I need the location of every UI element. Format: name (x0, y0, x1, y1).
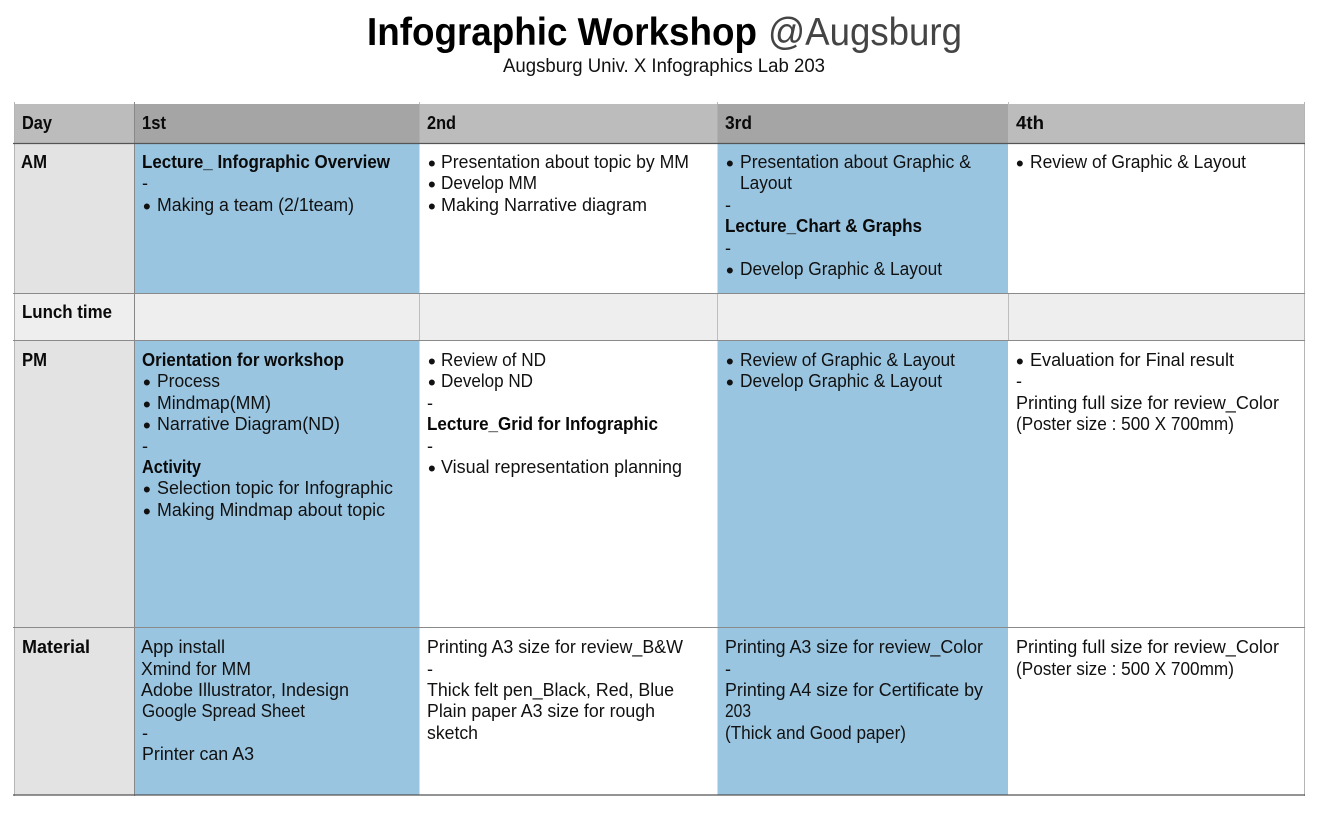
header: 1st (134, 104, 420, 144)
row: Lunch time: Lunch time (22, 302, 112, 322)
PM day 4: • (1016, 349, 1024, 374)
AM day 3: - (725, 195, 731, 215)
Material day 2 (427, 637, 683, 743)
AM day 2: Presentation about topic by MM (441, 152, 689, 172)
PM day 1: • (143, 499, 151, 524)
PM day 3: • (726, 370, 734, 395)
AM day 1: Making a team (2/1team) (157, 195, 354, 215)
PM day 2: • (428, 456, 436, 481)
PM day 1: Making Mindmap about topic (157, 500, 385, 520)
Material day 3: Printing A4 size for Certificate by (725, 680, 983, 700)
AM day 3 (718, 144, 1008, 293)
Material day 4 (1016, 637, 1279, 679)
row: PM (14, 340, 1279, 627)
Material day 4: (Poster size : 500 X 700mm) (1016, 659, 1234, 679)
AM day 3: Layout (740, 173, 792, 193)
Material day 2: - (427, 659, 433, 679)
PM day 1: Mindmap(MM) (157, 393, 271, 413)
Material day 1: Xmind for MM (141, 659, 251, 679)
PM day 2: Lecture_Grid for Infographic (427, 414, 658, 434)
Material day 3: 203 (725, 701, 751, 721)
AM day 3: Develop Graphic & Layout (740, 259, 942, 279)
row label: PM: PM (22, 350, 47, 370)
AM day 2: • (428, 194, 436, 219)
AM day 1: - (142, 173, 148, 193)
PM day 2: • (428, 349, 436, 374)
PM day 2: Visual representation planning (441, 457, 682, 477)
Material day 3: Printing A3 size for review_Color (725, 637, 983, 658)
row: AM (14, 144, 1246, 293)
main title: Infographic Workshop (367, 11, 757, 54)
PM day 1: Orientation for workshop (142, 350, 344, 370)
PM day 1: • (143, 392, 151, 417)
AM day 2: • (428, 172, 436, 197)
AM day 4: Review of Graphic & Layout (1030, 152, 1246, 172)
header: 3rd: 3rd (725, 113, 752, 133)
header: 4th (1008, 104, 1304, 144)
AM day 2: • (428, 151, 436, 176)
row: Lunch time (14, 293, 1304, 340)
PM day 2: Review of ND (441, 350, 546, 370)
AM day 3: • (726, 258, 734, 283)
subtitle: Augsburg Univ. X Infographics Lab 203 (503, 56, 825, 77)
Material day 1: - (142, 723, 148, 743)
PM day 1: Process (157, 371, 220, 391)
PM day 1: Selection topic for Infographic (157, 478, 393, 498)
PM day 4: (Poster size : 500 X 700mm) (1016, 414, 1234, 434)
AM day 1: • (143, 194, 151, 219)
PM day 1: • (143, 413, 151, 438)
AM day 1 (134, 144, 420, 293)
Material day 2: sketch (427, 723, 478, 743)
header: 4th: 4th (1016, 113, 1044, 133)
PM day 4: Evaluation for Final result (1030, 350, 1234, 370)
main title (367, 11, 962, 54)
Material day 3: - (725, 659, 731, 679)
PM day 2: • (428, 370, 436, 395)
Material day 3 (718, 627, 1008, 795)
Material day 2: Plain paper A3 size for rough (427, 701, 655, 721)
row label: Material: Material (22, 637, 90, 657)
PM day 2: Develop ND (441, 371, 533, 391)
PM day 1: • (143, 477, 151, 502)
header row (14, 104, 1304, 144)
PM day 2: - (427, 393, 433, 413)
AM day 1: Lecture_ Infographic Overview (142, 152, 391, 172)
main title: @Augsburg (768, 11, 962, 54)
PM day 4: - (1016, 371, 1022, 391)
Material day 1: App install (141, 637, 225, 657)
AM day 3: Lecture_Chart & Graphs (725, 216, 922, 236)
PM day 1: Narrative Diagram(ND) (157, 414, 340, 434)
header: 2nd: 2nd (427, 113, 456, 133)
header: 1st: 1st (142, 113, 166, 133)
Material day 1: Adobe Illustrator, Indesign (141, 680, 349, 700)
header: Day: Day (22, 113, 52, 133)
row label: Material (14, 627, 134, 795)
row label: AM (14, 144, 134, 293)
PM day 3 (718, 340, 1008, 627)
AM day 4: • (1016, 151, 1024, 176)
AM day 3: • (726, 151, 734, 176)
Material day 1: Printer can A3 (142, 744, 254, 764)
header: Day (14, 104, 134, 144)
PM day 4 (1016, 349, 1279, 434)
AM day 2 (428, 151, 689, 219)
Material day 1: Google Spread Sheet (142, 701, 305, 721)
Material day 4: Printing full size for review_Color (1016, 637, 1279, 658)
PM day 1: • (143, 370, 151, 395)
Material day 2: Printing A3 size for review_B&W (427, 637, 683, 658)
row label: PM (14, 340, 134, 627)
title block (367, 11, 962, 77)
Material day 1 (134, 627, 420, 795)
row: Material (14, 627, 1279, 795)
header: 3rd (718, 104, 1008, 144)
PM day 1 (134, 340, 420, 627)
PM day 2: - (427, 436, 433, 456)
AM day 3: - (725, 238, 731, 258)
AM day 2: Develop MM (441, 173, 537, 193)
row label: AM: AM (21, 152, 47, 172)
PM day 1: - (142, 436, 148, 456)
PM day 4: Printing full size for review_Color (1016, 393, 1279, 414)
PM day 1: Activity (142, 457, 201, 477)
header: 2nd (420, 104, 718, 144)
Material day 2: Thick felt pen_Black, Red, Blue (427, 680, 674, 701)
PM day 2 (427, 349, 682, 481)
PM day 3: Develop Graphic & Layout (740, 371, 942, 391)
Material day 3: (Thick and Good paper) (725, 723, 906, 743)
AM day 2: Making Narrative diagram (441, 195, 647, 215)
AM day 3: Presentation about Graphic & (740, 152, 971, 172)
PM day 3: • (726, 349, 734, 374)
PM day 3: Review of Graphic & Layout (740, 350, 955, 370)
